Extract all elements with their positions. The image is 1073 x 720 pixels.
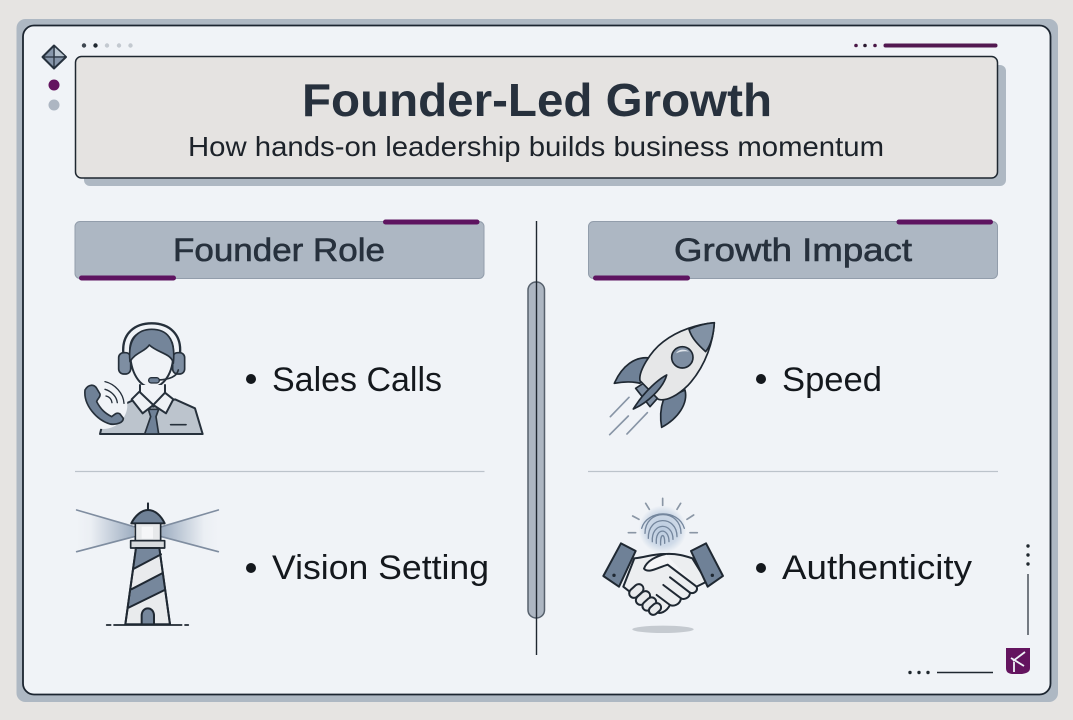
icon: headset support agent — [79, 323, 203, 434]
bullet: Authenticity: Authenticity — [782, 549, 972, 587]
title: Founder-Led Growth — [302, 74, 772, 126]
title panel — [76, 56, 1006, 186]
bullet: Sales Calls: Sales Calls — [272, 361, 442, 399]
icon: lighthouse — [77, 503, 218, 625]
heading: Founder Role — [75, 220, 484, 280]
grey dot — [48, 100, 60, 110]
purple dot — [48, 80, 60, 90]
icon: diamond logo — [42, 46, 66, 68]
heading: Founder Role: Founder Role — [173, 232, 385, 268]
subtitle: How hands-on leadership builds business momentum — [188, 131, 884, 162]
bottom-right horizontal accent — [908, 671, 993, 674]
top-right accent — [854, 44, 998, 48]
heading: Growth Impact — [588, 220, 998, 280]
icon: purple shield logo — [1006, 648, 1030, 674]
icon: rocket — [610, 323, 714, 435]
icon: handshake with fingerprint — [603, 498, 723, 633]
bullet: Speed: Speed — [782, 361, 882, 399]
bullet: Vision Setting: Vision Setting — [272, 549, 489, 587]
heading: Growth Impact: Growth Impact — [674, 232, 912, 268]
top-left dots — [82, 43, 133, 48]
center divider — [528, 221, 544, 655]
bottom-right vertical accent — [1026, 544, 1030, 635]
